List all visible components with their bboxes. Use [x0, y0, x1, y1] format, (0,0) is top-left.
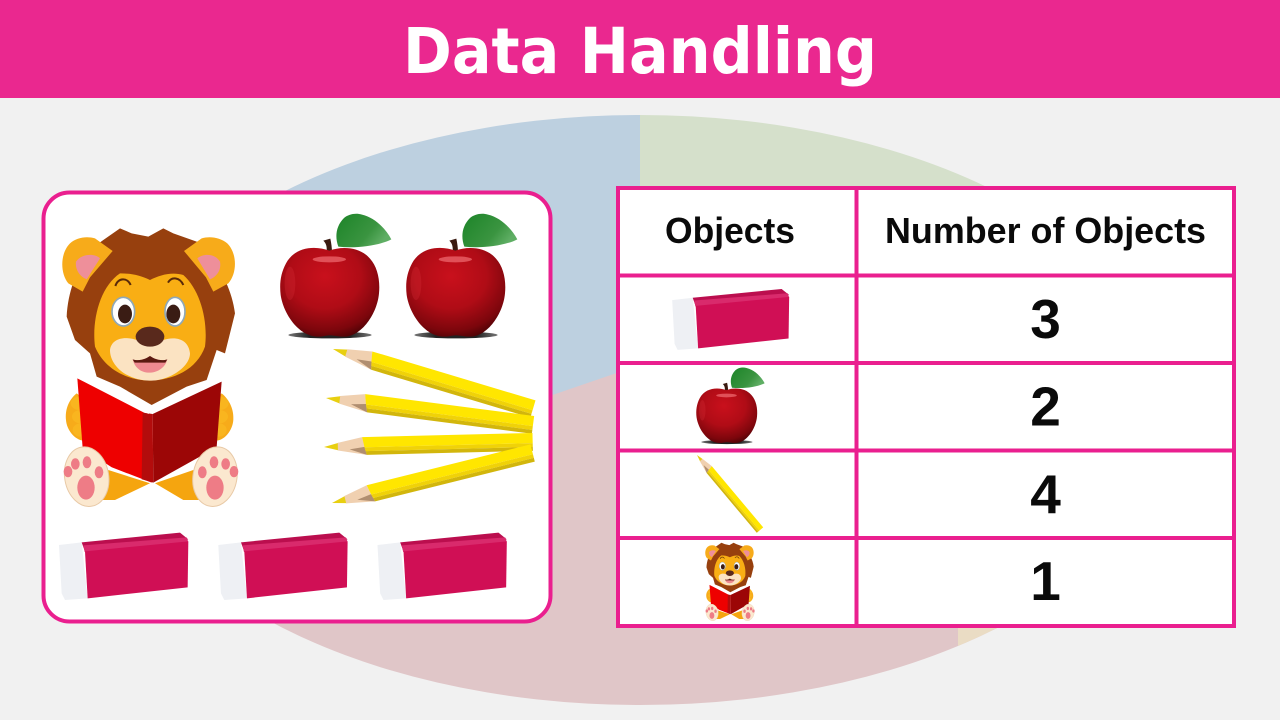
row icon: eraser [672, 289, 789, 350]
row value: pencil count: 4 [1030, 463, 1061, 525]
title: Data Handling [403, 15, 877, 88]
title banner [0, 0, 1280, 98]
background pie chart [274, 115, 997, 705]
icon: two apples [280, 214, 517, 338]
icon: lion reading a book [60, 228, 242, 510]
panel: objects picture [44, 192, 550, 622]
table: objects and counts [618, 188, 1234, 626]
column heading: number of objects: Number of Objects [885, 210, 1206, 251]
row icon: lion [705, 543, 756, 622]
icon: four pencils [324, 340, 536, 512]
column heading: objects: Objects [665, 210, 795, 251]
icon: three erasers [59, 533, 507, 600]
row icon: apple [696, 367, 765, 444]
row value: apple count: 2 [1030, 376, 1061, 438]
row value: eraser count: 3 [1030, 288, 1061, 350]
row icon: pencil [694, 452, 763, 533]
row value: lion count: 1 [1030, 550, 1061, 612]
